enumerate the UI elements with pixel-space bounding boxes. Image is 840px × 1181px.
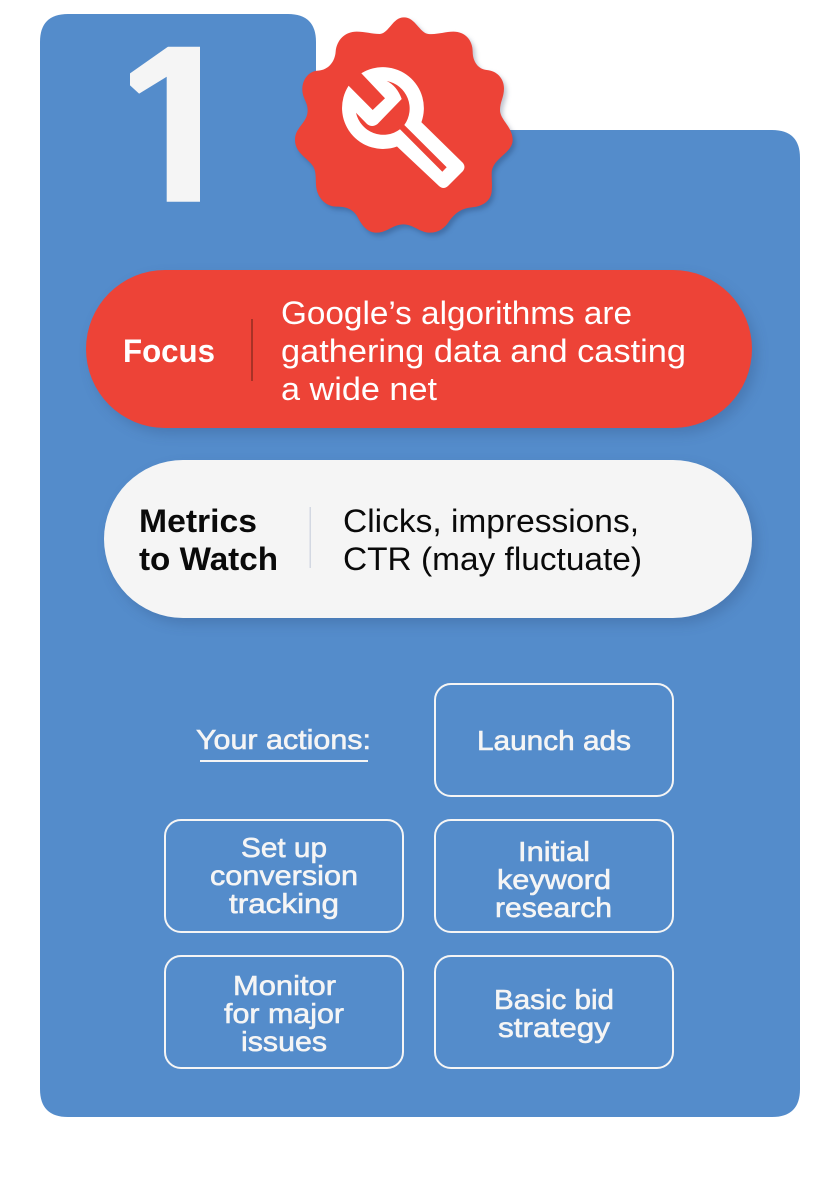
step number: 1 <box>94 28 262 238</box>
focus description <box>281 295 686 407</box>
focus description: Google’s algorithms are <box>281 295 632 331</box>
action: set up conversion tracking: Set up <box>241 832 327 863</box>
heading: your actions: Your actions: <box>196 724 371 755</box>
action: launch ads <box>435 684 673 796</box>
action: set up conversion tracking <box>165 820 403 932</box>
action: basic bid strategy <box>435 956 673 1068</box>
action: basic bid strategy: Basic bid <box>494 984 614 1015</box>
action: monitor for major issues: issues <box>241 1026 327 1057</box>
action: initial keyword research: research <box>495 892 612 923</box>
action: initial keyword research <box>435 820 673 932</box>
panel: metrics pill <box>104 460 752 618</box>
action: set up conversion tracking: tracking <box>229 888 339 919</box>
focus description: gathering data and casting <box>281 333 686 369</box>
action: initial keyword research: keyword <box>497 864 611 895</box>
action: basic bid strategy: strategy <box>498 1012 610 1043</box>
divider <box>310 507 311 568</box>
focus description: a wide net <box>281 371 437 407</box>
focus label: Focus <box>123 333 215 369</box>
badge shape <box>295 17 513 233</box>
action: monitor for major issues: for major <box>224 998 344 1029</box>
metrics description: Clicks, impressions, <box>343 503 639 539</box>
action: monitor for major issues: Monitor <box>233 970 336 1001</box>
pill background <box>86 270 752 428</box>
divider <box>251 319 253 381</box>
metrics description: CTR (may fluctuate) <box>343 541 642 577</box>
metrics label: to Watch <box>139 541 278 577</box>
pill background <box>104 460 752 618</box>
action: monitor for major issues <box>165 956 403 1068</box>
metrics description <box>343 503 642 577</box>
action: initial keyword research: Initial <box>518 836 590 867</box>
metrics label: Metrics <box>139 503 257 539</box>
icon: red badge with wrench <box>295 17 513 233</box>
action: set up conversion tracking: conversion <box>210 860 358 891</box>
icon: wrench <box>342 67 464 188</box>
metrics label <box>139 503 278 577</box>
panel: focus pill <box>86 270 752 428</box>
action: launch ads: Launch ads <box>477 725 631 756</box>
